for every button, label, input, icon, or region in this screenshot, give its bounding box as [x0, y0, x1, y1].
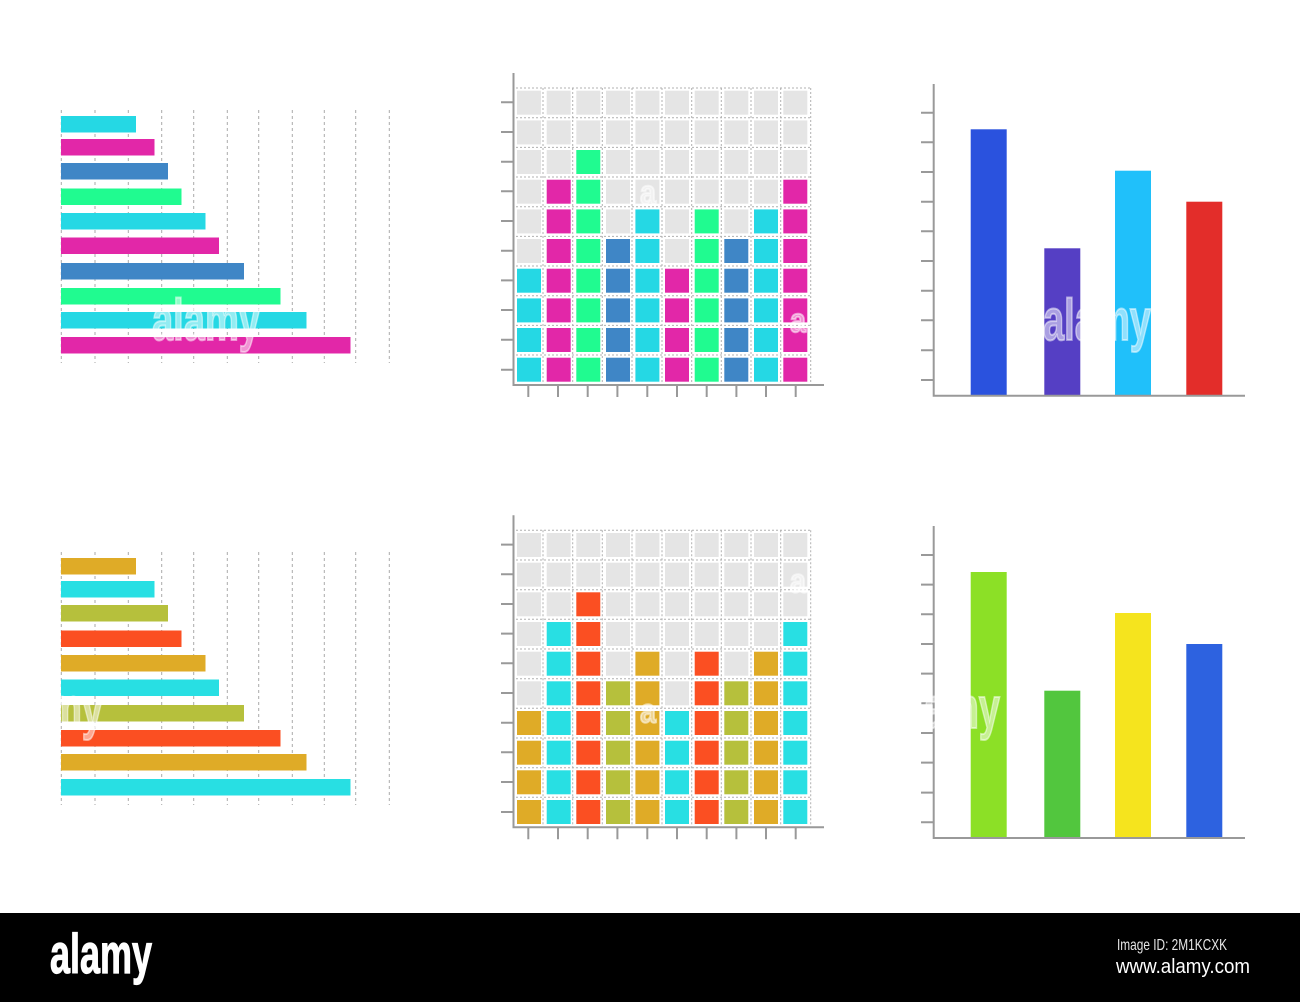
footer logo: alamy	[50, 922, 152, 985]
panel: unit grid chart, bottom row	[501, 515, 824, 839]
website: www.alamy.com	[1115, 956, 1250, 978]
panel: unit grid chart, top row	[501, 73, 824, 397]
panel: unit grid chart, bottom row: a	[640, 692, 657, 730]
footer bar	[0, 913, 1300, 1002]
panel: horizontal bar chart, top row: alamy	[152, 288, 260, 353]
panel: vertical bar chart, top row	[921, 84, 1245, 396]
panel: vertical bar chart, bottom row	[892, 526, 1245, 838]
panel: unit grid chart, top row: a	[640, 174, 657, 212]
image id: Image ID: 2M1KCXK	[1117, 937, 1227, 954]
panel: horizontal bar chart, bottom row	[0, 552, 389, 805]
panel: horizontal bar chart, top row	[61, 110, 389, 363]
panel: unit grid chart, top row: a	[790, 302, 807, 340]
panel: unit grid chart, bottom row: a	[790, 562, 807, 600]
panel: vertical bar chart, top row: alamy	[1043, 288, 1151, 353]
panel: vertical bar chart, bottom row: alamy	[892, 676, 1000, 741]
